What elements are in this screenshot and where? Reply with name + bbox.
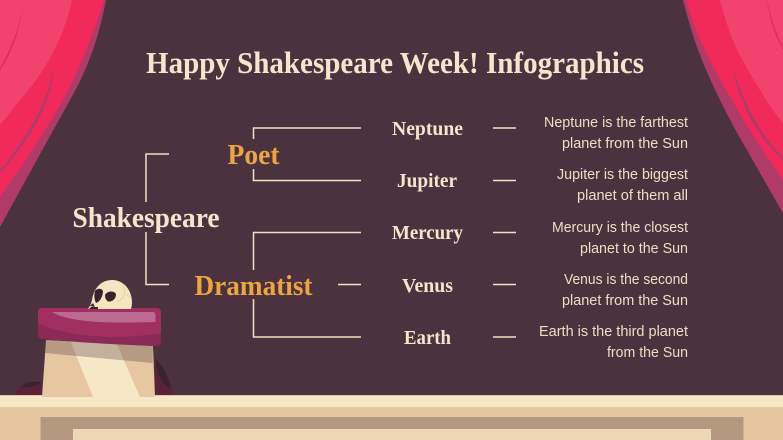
row: Mercury: Mercury <box>392 222 463 244</box>
row: Neptune: Neptune is the farthest <box>544 115 688 131</box>
row: Earth: from the Sun <box>607 345 688 361</box>
row: Venus: Venus <box>402 275 453 297</box>
root label: Shakespeare: Shakespeare <box>72 203 220 234</box>
bracket: root to categories <box>146 154 169 284</box>
bracket: Poet <box>254 128 361 180</box>
lectern with skull <box>16 280 173 397</box>
category: Dramatist: Dramatist <box>194 271 313 302</box>
row: Earth: Earth <box>404 327 451 349</box>
stage <box>0 395 783 440</box>
row: Venus: planet from the Sun <box>562 293 688 309</box>
bracket: Dramatist <box>254 232 361 337</box>
row: Neptune <box>392 115 688 152</box>
icon: skull <box>88 280 132 309</box>
row: Mercury <box>392 220 688 257</box>
row: Neptune: Neptune <box>392 118 463 140</box>
row: Mercury: Mercury is the closest <box>552 220 688 236</box>
row: Neptune: planet from the Sun <box>562 136 688 152</box>
row: Venus: Venus is the second <box>564 272 688 288</box>
row: Jupiter: planet of them all <box>577 188 688 204</box>
row: Jupiter: Jupiter is the biggest <box>557 167 688 183</box>
right curtain <box>683 0 783 213</box>
title: Happy Shakespeare Week! Infographics <box>146 45 644 80</box>
category: Poet: Poet <box>228 140 280 171</box>
left curtain <box>0 0 106 227</box>
row: Venus <box>402 272 688 309</box>
row: Mercury: planet to the Sun <box>580 241 688 257</box>
row: Earth <box>404 324 688 361</box>
row: Jupiter: Jupiter <box>397 170 457 192</box>
row: Earth: Earth is the third planet <box>539 324 688 340</box>
row: Jupiter <box>397 167 688 204</box>
